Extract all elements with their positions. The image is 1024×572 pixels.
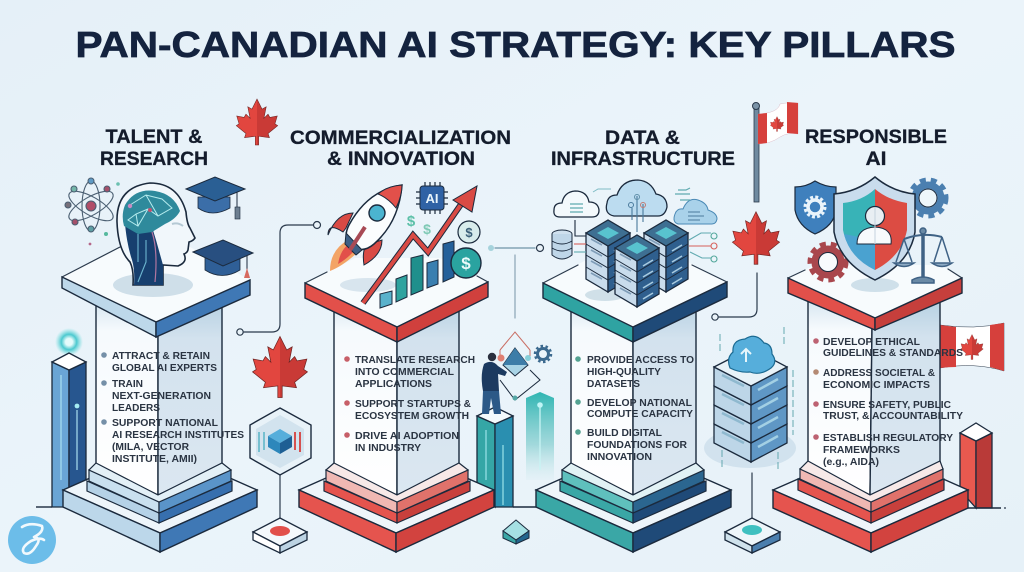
plinth	[324, 463, 470, 523]
network hexagon with prism and gear	[498, 332, 551, 400]
heading: commercialization: & INNOVATION	[327, 149, 475, 170]
base	[63, 447, 257, 552]
coins: $	[465, 225, 473, 240]
bullet list: data: BUILD DIGITAL	[587, 428, 662, 439]
bullet list: talent: TRAIN	[112, 379, 143, 390]
bar chart with growth arrow	[363, 186, 477, 308]
bullet list: commercialization: SUPPORT STARTUPS &	[355, 399, 471, 410]
database cylinder	[552, 230, 572, 259]
bullet list: data: DEVELOP NATIONAL	[587, 398, 692, 409]
panel: talent and research pillar	[62, 127, 257, 552]
red tall bar	[960, 423, 1006, 509]
bullet list: data: COMPUTE CAPACITY	[587, 409, 693, 420]
plinth	[87, 463, 232, 523]
bullet list: data: HIGH-QUALITY	[587, 367, 661, 378]
hexagon cube node	[250, 408, 311, 475]
connector lines between pillars	[237, 222, 757, 522]
decoration: right-centre maple leaf	[732, 212, 780, 264]
plinth	[560, 463, 706, 523]
bullet list: responsible AI: ENSURE SAFETY, PUBLIC	[823, 400, 951, 411]
panel: responsible AI pillar	[773, 127, 968, 552]
server stack with upload cloud	[704, 327, 796, 470]
heading: responsible AI: AI	[866, 149, 886, 170]
top slab	[543, 258, 727, 342]
coins: $	[461, 254, 471, 273]
heading: responsible AI: RESPONSIBLE	[805, 127, 947, 148]
bullet list: talent: SUPPORT NATIONAL	[112, 418, 218, 429]
bullet list: talent	[101, 351, 244, 465]
bullet list: responsible AI: ADDRESS SOCIETAL &	[823, 368, 935, 379]
bullet list: talent: GLOBAL AI EXPERTS	[112, 363, 217, 374]
bullet list: data	[575, 355, 694, 463]
top slab	[788, 265, 962, 330]
small teal plate	[725, 518, 780, 553]
bullet list: data: DATASETS	[587, 379, 640, 390]
circuit nodes	[574, 220, 717, 262]
bullet list: talent: ATTRACT & RETAIN	[112, 351, 210, 362]
bullet list: responsible AI: DEVELOP ETHICAL	[823, 337, 920, 348]
bullet list: talent: INSTITUTE, AMII)	[112, 454, 197, 465]
heading: data	[551, 128, 735, 170]
small red plate	[253, 518, 307, 553]
graduation cap	[186, 177, 245, 219]
bullet list: responsible AI: GUIDELINES & STANDARDS	[823, 348, 963, 359]
column	[96, 300, 222, 495]
heading: data: DATA &	[605, 128, 680, 149]
decoration: centre-left maple leaf	[253, 336, 307, 398]
scales of justice	[894, 228, 952, 283]
column	[334, 300, 459, 495]
bullet list: responsible AI: TRUST, & ACCOUNTABILITY	[823, 411, 963, 422]
title: PAN-CANADIAN AI STRATEGY: KEY PILLARS	[76, 24, 956, 65]
waving Canadian flag	[940, 323, 1004, 371]
flag on pole	[752, 102, 798, 202]
bullet list: responsible AI: FRAMEWORKS	[823, 445, 900, 456]
bullet list: data: FOUNDATIONS FOR	[587, 440, 687, 451]
red gear	[810, 244, 846, 280]
panel: commercialization and innovation pillar	[290, 128, 511, 552]
coins	[451, 221, 481, 278]
AI chip icon: AI	[426, 191, 438, 206]
person	[482, 353, 507, 414]
server racks	[586, 220, 688, 307]
main shield with person	[834, 177, 915, 280]
bullet list: talent: LEADERS	[112, 403, 160, 414]
bullet list: data: PROVIDE ACCESS TO	[587, 355, 694, 366]
bullet list: data: INNOVATION	[587, 452, 652, 463]
bullet list: responsible AI: ESTABLISH REGULATORY	[823, 433, 953, 444]
bullet list: responsible AI	[813, 337, 963, 468]
bullet list: commercialization: IN INDUSTRY	[355, 443, 421, 454]
column	[571, 300, 696, 495]
dollar signs	[407, 213, 431, 237]
plinth	[798, 461, 944, 523]
heading: talent	[100, 127, 208, 170]
clouds	[554, 180, 717, 232]
blue gear	[910, 180, 946, 216]
heading: commercialization: COMMERCIALIZATION	[290, 128, 511, 149]
base	[299, 447, 494, 552]
logo badge	[8, 516, 56, 564]
bullet list: responsible AI: ECONOMIC IMPACTS	[823, 380, 930, 391]
AI chip icon	[416, 182, 448, 214]
blue tall bar with orb	[36, 328, 86, 507]
heading: talent: TALENT &	[106, 127, 203, 148]
heading: commercialization	[290, 128, 511, 170]
heading: talent: RESEARCH	[100, 149, 208, 170]
heading: data: INFRASTRUCTURE	[551, 149, 735, 170]
base	[773, 447, 968, 552]
bullet list: commercialization: APPLICATIONS	[355, 379, 432, 390]
teal tall bar with person	[477, 353, 536, 507]
bullet list: responsible AI: (e.g., AIDA)	[823, 457, 879, 468]
top slab	[62, 247, 250, 337]
bullet list: commercialization: TRANSLATE RESEARCH	[355, 355, 475, 366]
bullet list: commercialization: ECOSYSTEM GROWTH	[355, 411, 469, 422]
upload cloud	[729, 336, 775, 373]
dollar signs: $	[407, 213, 416, 230]
bullet list: talent: AI RESEARCH INSTITUTES	[112, 430, 244, 441]
base	[536, 447, 731, 552]
teal fading bar	[526, 392, 554, 480]
bullet list: commercialization	[344, 355, 475, 454]
AI head icon	[117, 183, 195, 285]
bullet list: talent: (MILA, VECTOR	[112, 442, 189, 453]
decoration: top-left maple leaf	[236, 99, 278, 145]
panel: data and infrastructure pillar	[536, 128, 735, 552]
rocket icon	[328, 185, 402, 271]
bullet list: talent: NEXT-GENERATION	[112, 391, 211, 402]
top slab	[305, 258, 488, 342]
atom icon	[65, 178, 120, 245]
small blue shield with gear	[795, 181, 836, 234]
heading: responsible AI	[805, 127, 947, 170]
column	[808, 298, 940, 495]
bullet list: commercialization: INTO COMMERCIAL	[355, 367, 454, 378]
bullet list: commercialization: DRIVE AI ADOPTION	[355, 431, 459, 442]
dollar signs: $	[423, 221, 431, 237]
graduation cap lower	[193, 240, 253, 278]
small teal cube	[503, 520, 529, 544]
